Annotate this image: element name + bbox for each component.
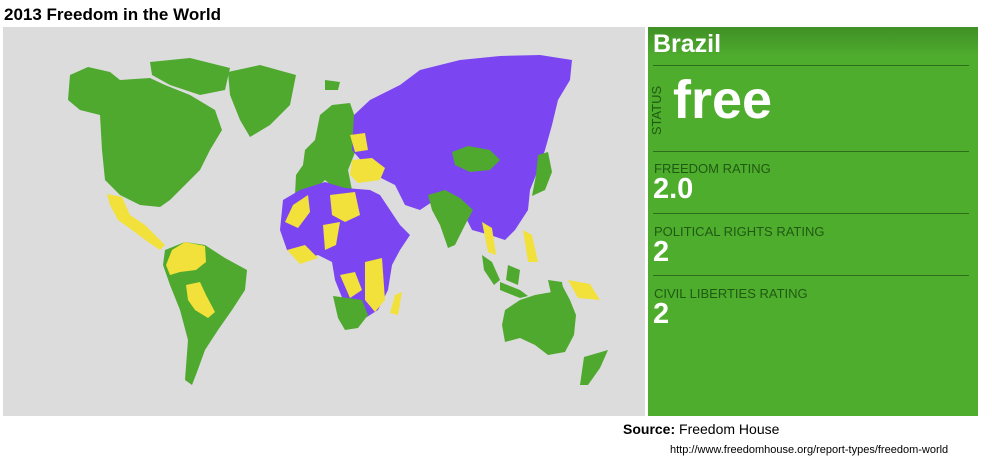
source url: http://www.freedomhouse.org/report-types/freedom-world [670,444,948,456]
political rights rating [653,224,824,268]
turkey / ukraine yellow [350,133,385,183]
world map [3,27,645,416]
mongolia [452,146,500,172]
europe [295,103,356,195]
australia [502,285,608,385]
political rights rating: 2 [653,236,669,268]
freedom rating: FREEDOM RATING [654,161,771,176]
source: Source: Freedom House [623,421,779,437]
south america [163,242,247,385]
panel: Brazil [648,27,978,416]
africa [280,182,410,330]
status [649,70,772,135]
civil liberties rating: CIVIL LIBERTIES RATING [654,286,808,301]
india [428,190,473,248]
mexico / central america [107,194,165,250]
freedom rating [653,161,771,205]
southeast asia [482,222,600,300]
japan [532,152,552,196]
civil liberties rating: 2 [653,298,669,330]
civil liberties rating [653,286,808,330]
status value: free [673,70,772,130]
freedom rating: 2.0 [653,173,693,205]
north america [68,58,340,207]
political rights rating: POLITICAL RIGHTS RATING [654,224,824,239]
title: 2013 Freedom in the World [4,5,221,24]
country name: Brazil [653,30,721,58]
russia & asia [352,55,572,240]
status label: STATUS [649,86,664,135]
